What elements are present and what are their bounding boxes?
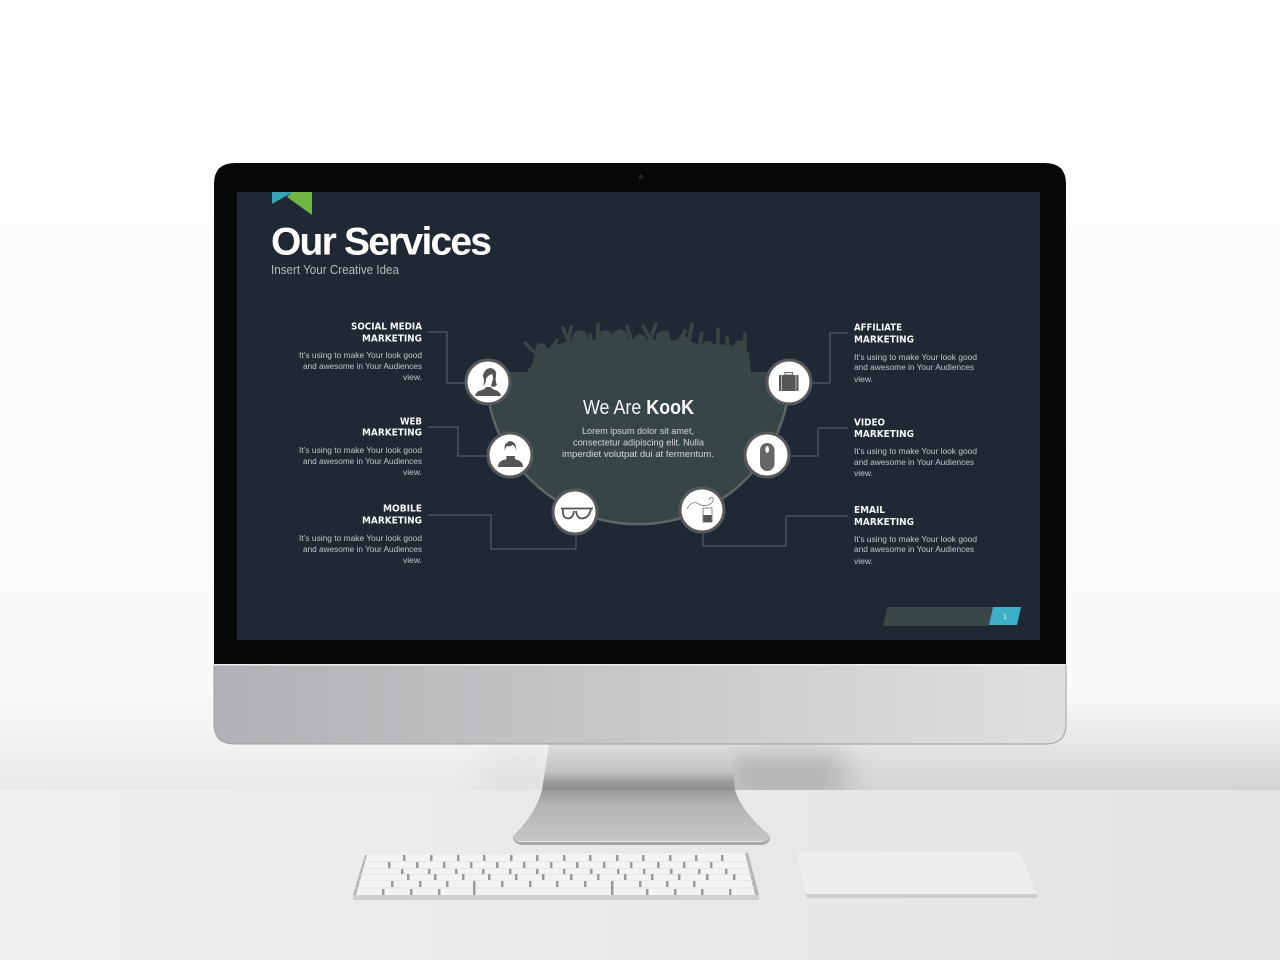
service: affiliate marketing: It’s using to make Your look good (854, 352, 977, 362)
semicircle outline arc (487, 392, 789, 524)
service: web marketing: WEB (400, 416, 422, 428)
service: social media marketing: view. (403, 372, 422, 382)
title: Our Services (271, 220, 492, 264)
service: social media marketing: SOCIAL MEDIA (351, 322, 422, 332)
service: email marketing: and awesome in Your Audiences (854, 544, 974, 554)
service: affiliate marketing: MARKETING (854, 334, 914, 346)
crowd silhouette (525, 324, 751, 373)
key gaps (382, 855, 736, 895)
service: video marketing: VIDEO (854, 418, 885, 428)
service: video marketing: view. (854, 468, 873, 478)
service: email marketing: EMAIL (854, 505, 886, 516)
service: mobile marketing: MARKETING (362, 516, 422, 526)
service: affiliate marketing: AFFILIATE (854, 322, 902, 334)
service: mobile marketing (299, 504, 422, 565)
service: web marketing: view. (403, 467, 422, 477)
centre description: consectetur adipiscing elit. Nulla (573, 436, 705, 448)
monitor body (214, 163, 1066, 744)
icon: woman (466, 360, 510, 404)
service: affiliate marketing: view. (854, 374, 873, 384)
service: video marketing: MARKETING (854, 429, 914, 440)
trackpad (797, 852, 1038, 898)
page number badge: 1 (1003, 614, 1007, 621)
service: web marketing (299, 416, 422, 477)
service: video marketing: It’s using to make Your look good (854, 446, 977, 456)
service: web marketing: It’s using to make Your look good (299, 445, 422, 455)
icon: glasses (553, 490, 597, 534)
service: social media marketing (299, 322, 422, 382)
service: email marketing: view. (854, 556, 873, 566)
central semicircle with crowd (486, 324, 790, 524)
service: social media marketing: It’s using to make Your look good (299, 350, 422, 360)
service: email marketing: It’s using to make Your look good (854, 534, 977, 544)
service: mobile marketing: view. (403, 555, 422, 565)
service: video marketing (854, 418, 977, 478)
slide screen (237, 192, 1040, 640)
service: mobile marketing: MOBILE (383, 504, 422, 514)
service: web marketing: MARKETING (362, 428, 422, 438)
icon: mouse (745, 433, 789, 477)
icon: man (488, 433, 532, 477)
monitor stand (513, 744, 770, 845)
semicircle (486, 372, 790, 524)
page number badge (883, 607, 1021, 626)
centre description: imperdiet volutpat dui at fermentum. (562, 448, 714, 459)
room background (0, 700, 1280, 960)
icon: music player (680, 488, 724, 532)
icon: briefcase (767, 360, 811, 404)
service: mobile marketing: and awesome in Your Audiences (303, 544, 422, 554)
logo ribbon (272, 192, 312, 215)
subtitle: Insert Your Creative Idea (271, 263, 399, 277)
service: affiliate marketing (854, 322, 977, 384)
service: email marketing (854, 505, 977, 566)
service: mobile marketing: It’s using to make Your look good (299, 533, 422, 543)
keyboard (353, 853, 759, 900)
heading: we are kook: We Are KooK (583, 397, 694, 419)
connector lines (428, 332, 848, 549)
service: social media marketing: MARKETING (362, 334, 422, 344)
centre description (562, 425, 714, 459)
service: social media marketing: and awesome in Your Audiences (303, 361, 422, 371)
service: video marketing: and awesome in Your Audiences (854, 457, 974, 467)
service: affiliate marketing: and awesome in Your Audiences (854, 362, 974, 372)
centre description: Lorem ipsum dolor sit amet, (582, 425, 694, 436)
service: email marketing: MARKETING (854, 517, 914, 528)
service: web marketing: and awesome in Your Audiences (303, 456, 422, 466)
